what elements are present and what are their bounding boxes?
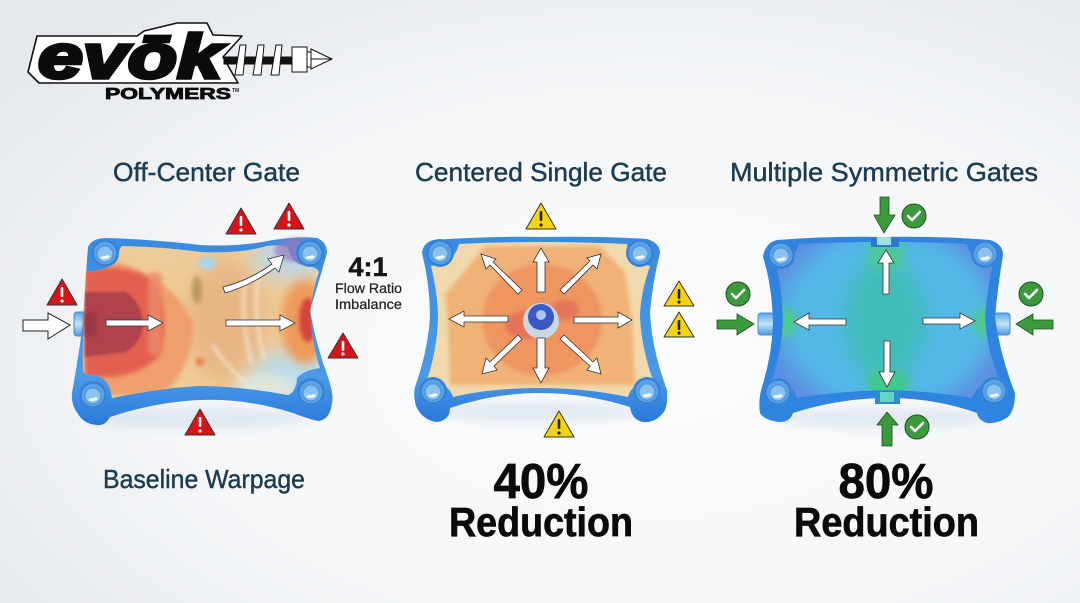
- label: baseline warpage: Baseline Warpage: [103, 464, 305, 494]
- plate body: [72, 237, 332, 425]
- plate shadow: [430, 402, 650, 422]
- trademark: TM: [232, 88, 239, 94]
- top and bottom gate tabs: [871, 238, 899, 247]
- mounting holes: [764, 240, 1008, 406]
- result: 80% reduction: [794, 455, 979, 545]
- result: 80% reduction: Reduction: [794, 499, 979, 545]
- result: 40% reduction: Reduction: [449, 499, 633, 545]
- warning icons: centered single gate: [526, 203, 694, 437]
- callout: flow ratio imbalance: [335, 252, 402, 312]
- green check badges: [726, 204, 1043, 439]
- logo wordmark: evōk: [38, 23, 227, 92]
- mounting holes: [419, 239, 661, 405]
- heat map: [82, 245, 320, 398]
- flow arrows: [449, 248, 632, 383]
- logo badge outline: [28, 23, 242, 83]
- heading: off-center gate: Off-Center Gate: [113, 157, 300, 187]
- panel: off-center gate plate: [23, 235, 340, 428]
- gate stub: [74, 312, 88, 336]
- arrow: flow right: [226, 315, 295, 331]
- heat map: [772, 242, 999, 398]
- white flow arrows: [794, 250, 975, 387]
- logo subtitle: POLYMERS: [105, 86, 231, 103]
- plate shadow: [775, 408, 995, 428]
- panel: multiple symmetric gates plate: [717, 197, 1053, 446]
- gate hot spot: [84, 312, 96, 336]
- green inlet arrows: [717, 197, 1053, 446]
- result: 40% reduction: 40%: [494, 455, 588, 509]
- callout: flow ratio imbalance: Imbalance: [335, 297, 402, 312]
- warped purple corner: [274, 238, 322, 262]
- heading: multiple symmetric gates: Multiple Symmetric Gates: [730, 157, 1038, 187]
- plate body: [414, 237, 667, 422]
- plate shadow: [90, 408, 310, 428]
- warning icons: off-center gate: [47, 203, 358, 435]
- logo: evok polymers: [28, 23, 332, 103]
- callout: flow ratio imbalance: Flow Ratio: [335, 281, 402, 296]
- arrow: flow center: [106, 315, 163, 331]
- logo screw: [224, 45, 332, 75]
- mounting holes: [79, 239, 325, 409]
- center gate hub: [523, 303, 559, 339]
- side gate stubs: [758, 313, 774, 335]
- result: 80% reduction: 80%: [838, 455, 934, 509]
- panel: centered single gate plate: [414, 235, 667, 422]
- callout: flow ratio imbalance: 4:1: [348, 252, 388, 282]
- plate body: [759, 237, 1015, 423]
- arrow: flow curved: [223, 255, 284, 293]
- result: 40% reduction: [449, 455, 633, 545]
- heading: centered single gate: Centered Single Gate: [415, 157, 667, 187]
- heat map: [428, 242, 652, 397]
- arrow: inlet: [23, 313, 70, 339]
